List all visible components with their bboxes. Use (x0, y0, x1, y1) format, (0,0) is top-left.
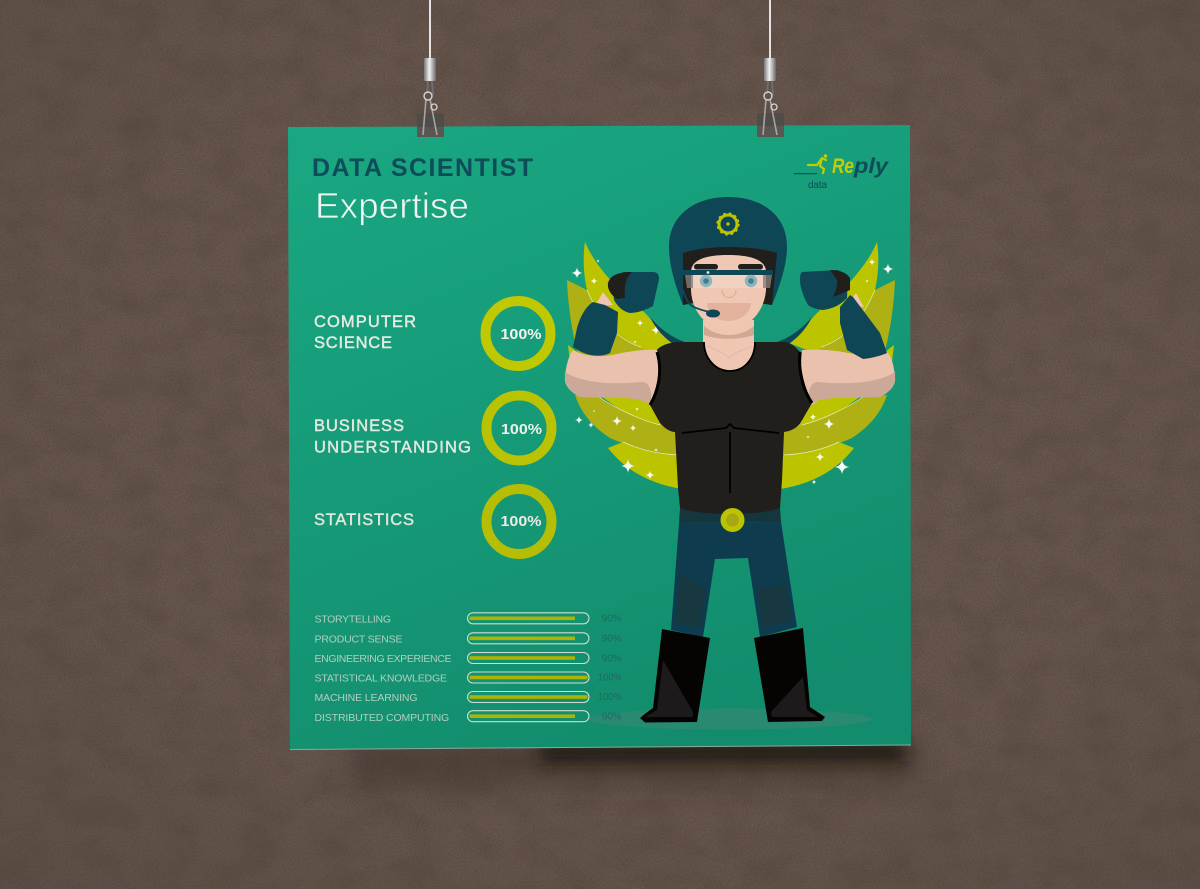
mouth (707, 303, 751, 321)
skill: computer science (314, 301, 550, 366)
right fist (800, 270, 850, 310)
subtitle: Expertise (315, 185, 469, 226)
skill: business understanding (314, 396, 552, 460)
left wing (567, 242, 682, 489)
eyebrows (694, 264, 763, 270)
bar: statistical knowledge: STATISTICAL KNOWLEDGE (314, 673, 447, 685)
bar: product sense: 90% (602, 633, 622, 644)
left arm (565, 292, 662, 405)
left fist (608, 272, 659, 313)
nose (722, 290, 736, 298)
ring: 100%: 100% (500, 327, 542, 343)
poster drop shadow (350, 738, 915, 784)
progress bars (314, 613, 622, 724)
left boot (640, 629, 710, 722)
neck (698, 320, 760, 375)
bar: distributed computing (314, 711, 622, 724)
skill: business understanding: BUSINESS (314, 417, 404, 435)
logo: Reply data: data (808, 180, 827, 191)
skill: statistics: STATISTICS (314, 511, 414, 529)
belt (679, 508, 781, 532)
hanging clip: left (417, 0, 444, 137)
bar: product sense: PRODUCT SENSE (314, 633, 402, 645)
wings (567, 242, 895, 489)
poster sheet (288, 125, 911, 750)
icon: running figure (808, 154, 827, 173)
face (683, 255, 773, 330)
skill: statistics (314, 489, 552, 554)
ring: 100%: 100% (501, 422, 542, 438)
bar: storytelling: STORYTELLING (314, 614, 391, 626)
skill: business understanding: UNDERSTANDING (314, 438, 471, 456)
black shirt (650, 342, 812, 516)
bar: statistical knowledge: 100% (598, 672, 622, 684)
helmet gear emblem (717, 213, 739, 235)
character: data scientist superhero (565, 197, 895, 722)
hanging clip: right (757, 0, 784, 137)
bar: storytelling (314, 613, 622, 626)
skill: computer science: SCIENCE (314, 334, 392, 352)
bar: distributed computing: DISTRIBUTED COMPUTING (314, 712, 449, 724)
bar: statistical knowledge (314, 672, 622, 685)
bar: machine learning (314, 692, 622, 704)
bar: storytelling: 90% (602, 614, 622, 625)
bar: machine learning: 100% (598, 692, 622, 703)
logo: Reply data (794, 154, 889, 191)
ring: 100% (486, 489, 552, 554)
legs (640, 522, 825, 722)
ring: 100% (486, 301, 550, 366)
ground shadow (588, 708, 872, 730)
eyes (700, 275, 757, 287)
headset microphone (683, 290, 720, 318)
ring: 100% (486, 396, 552, 460)
bar: machine learning: MACHINE LEARNING (314, 692, 418, 704)
right boot (754, 628, 825, 722)
bar: engineering experience: ENGINEERING EXPERIENCE (314, 653, 452, 665)
sparkles (572, 258, 894, 484)
ring: 100%: 100% (500, 514, 542, 530)
right wing (780, 242, 895, 489)
helmet (669, 197, 787, 305)
bar: distributed computing: 90% (602, 712, 622, 722)
knee patches (676, 572, 792, 628)
smart glasses (683, 270, 773, 288)
right arm (800, 293, 895, 405)
trousers (671, 522, 797, 637)
title: DATA SCIENTIST (312, 154, 533, 182)
cape (650, 317, 812, 348)
skill: computer science: COMPUTER (314, 313, 416, 331)
belt buckle (720, 508, 744, 532)
bar: engineering experience: 90% (602, 653, 622, 664)
logo: Reply data: Re (832, 155, 854, 178)
logo: Reply data: ply (853, 155, 889, 178)
bar: product sense (314, 633, 622, 645)
bar: engineering experience (314, 652, 622, 665)
